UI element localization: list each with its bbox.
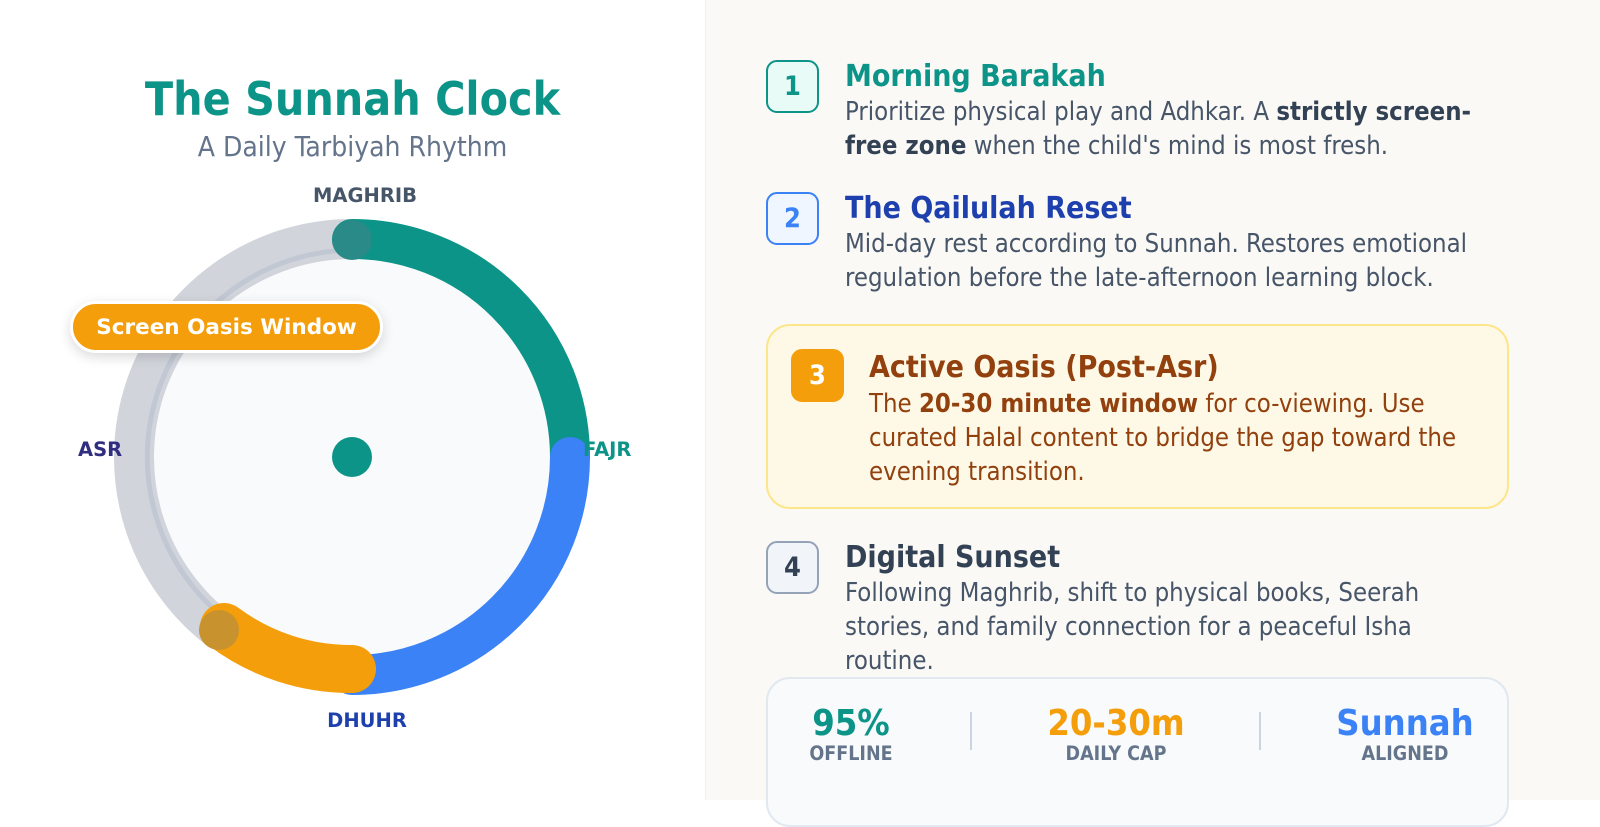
badge 3: 3 [809,360,826,391]
right panel [705,0,1600,800]
stat: aligned [1336,703,1474,765]
callout: screen oasis window [70,301,383,353]
arc: teal morning [352,239,570,457]
stats box [766,677,1509,827]
subtitle: A Daily Tarbiyah Rhythm [198,130,507,163]
text 3: The 20-30 minute window for co-viewing. Use curated Halal content to bridge the gap toward the evening transition. [869,389,1456,487]
arc: orange oasis [224,627,352,669]
stat: aligned: Sunnah [1336,703,1474,744]
item 2 [766,191,1467,293]
badge 3 [791,349,844,402]
heading 1: Morning Barakah [845,59,1106,94]
text 2: Mid-day rest according to Sunnah. Restores emotional regulation before the late-afternoon learning block. [845,229,1467,293]
arc: blue midday [352,457,570,675]
item 1 [766,59,1471,161]
badge 4 [766,541,819,594]
heading 4: Digital Sunset [845,540,1060,575]
title: The Sunnah Clock [145,72,560,126]
badge 2 [766,192,819,245]
text 1: Prioritize physical play and Adhkar. A strictly screen-free zone when the child's mind is most fresh. [845,97,1471,161]
labels: DHUHR [327,709,407,732]
item 3 highlighted [766,324,1509,509]
labels: ASR [78,438,122,461]
arc: gray remainder [134,239,352,631]
clock chart [78,184,631,732]
text 4: Following Maghrib, shift to physical books, Seerah stories, and family connection for a peaceful Isha routine. [845,578,1419,676]
labels [78,184,631,732]
badge 1: 1 [784,71,801,102]
badge 4: 4 [784,552,801,583]
heading 3: Active Oasis (Post-Asr) [869,350,1219,385]
center dot [332,437,372,477]
heading 2: The Qailulah Reset [845,191,1132,226]
callout: screen oasis window: Screen Oasis Window [96,314,357,340]
item 4 [766,540,1419,676]
clock face [152,257,552,657]
stat: daily cap [1047,703,1185,765]
stat: aligned: ALIGNED [1362,742,1448,765]
stat: offline: 95% [812,703,890,744]
labels: MAGHRIB [313,184,417,207]
labels: FAJR [583,438,631,461]
stat: daily cap: DAILY CAP [1066,742,1166,765]
stat: offline: OFFLINE [809,742,893,765]
badge 2: 2 [784,203,801,234]
stat: offline [809,703,893,765]
badge 1 [766,60,819,113]
stat: daily cap: 20-30m [1047,703,1185,744]
